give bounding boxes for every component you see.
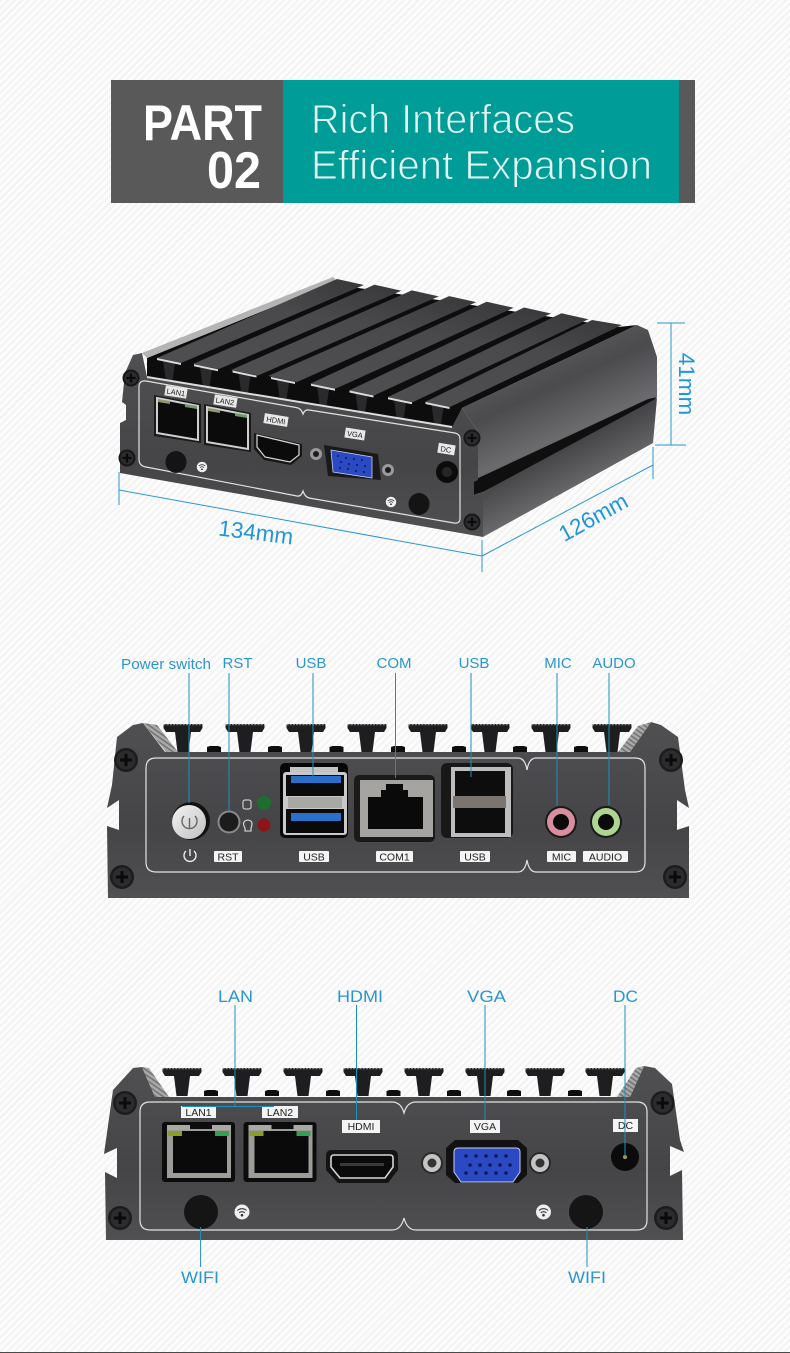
header banner xyxy=(111,80,695,203)
bottom rule xyxy=(0,1352,790,1353)
panel tags: VGA xyxy=(474,1121,496,1133)
callout labels: COM xyxy=(376,655,412,672)
heading: Rich Interfaces Efficient Expansion: Efficient Expansion xyxy=(311,142,652,188)
front panel outline xyxy=(139,381,460,523)
dimension: 134mm xyxy=(119,472,482,572)
dimension: 126mm: 126mm xyxy=(554,488,632,547)
power button xyxy=(172,802,210,840)
callout labels: HDMI xyxy=(337,988,383,1006)
heading: PART 02 xyxy=(143,95,262,200)
LED indicators xyxy=(243,796,271,832)
screws xyxy=(108,1091,678,1230)
heading: Rich Interfaces Efficient Expansion: Rich Interfaces xyxy=(311,96,575,142)
panel tags: USB xyxy=(464,852,486,864)
body xyxy=(104,1066,684,1240)
callout lines xyxy=(189,673,609,811)
port: VGA xyxy=(310,445,394,480)
AUDIO jack xyxy=(590,806,622,838)
panel outline xyxy=(146,758,645,872)
panel tags: COM1 xyxy=(379,852,410,864)
device: 3D perspective view with dimensions xyxy=(118,277,699,572)
port labels on panel xyxy=(164,385,456,455)
callout labels: USB xyxy=(459,655,489,672)
callout labels: MIC xyxy=(544,655,572,672)
screws xyxy=(118,370,480,530)
side face xyxy=(462,325,657,537)
port: LAN2 xyxy=(204,404,251,452)
panel tags: USB xyxy=(303,852,325,864)
panel tags xyxy=(184,849,628,864)
callout labels: WIFI xyxy=(181,1269,219,1287)
fins xyxy=(164,724,632,752)
port labels on panel: HDMI xyxy=(266,415,286,426)
body xyxy=(107,722,689,898)
heatsink fins top xyxy=(142,277,637,430)
port labels on panel: DC xyxy=(440,444,453,455)
port: DC xyxy=(436,461,458,483)
panel tags: LAN2 xyxy=(267,1107,293,1119)
dimension: 41mm: 41mm xyxy=(674,353,699,415)
panel outline xyxy=(140,1102,647,1230)
panel tags: AUDIO xyxy=(589,852,622,864)
dimension: 41mm xyxy=(655,323,699,445)
callout labels: USB xyxy=(296,655,326,672)
port labels on panel: LAN2 xyxy=(215,396,235,407)
port: HDMI xyxy=(326,1150,398,1183)
panel tags: DC xyxy=(618,1120,633,1132)
heading: PART 02: 02 xyxy=(207,142,261,200)
wifi caps and icons xyxy=(166,451,430,515)
port: VGA xyxy=(421,1140,551,1183)
callout labels: RST xyxy=(222,655,252,672)
callout labels: Power switch xyxy=(121,657,211,673)
screws xyxy=(110,748,687,889)
COM port xyxy=(354,775,435,842)
panel tags: RST xyxy=(218,852,239,864)
port: DC xyxy=(611,1143,639,1171)
dimension: 134mm: 134mm xyxy=(217,516,295,550)
callout labels xyxy=(121,655,636,673)
device: rear I/O view xyxy=(107,655,689,898)
heading: Rich Interfaces Efficient Expansion xyxy=(311,96,652,188)
port labels on panel: LAN1 xyxy=(166,387,186,398)
USB 3.0 stack xyxy=(280,763,348,838)
port: LAN1 xyxy=(162,1122,235,1182)
panel tags: MIC xyxy=(552,852,572,864)
callout labels xyxy=(181,988,638,1287)
MIC jack xyxy=(545,806,577,838)
port: LAN2 xyxy=(244,1122,316,1182)
port labels on panel: VGA xyxy=(346,429,363,440)
panel tags: HDMI xyxy=(348,1121,374,1133)
port: LAN1 xyxy=(154,395,201,443)
callout labels: WIFI xyxy=(568,1269,606,1287)
callout labels: DC xyxy=(613,988,638,1006)
reset button xyxy=(218,810,240,834)
callout lines xyxy=(182,1005,625,1267)
dimension: 126mm xyxy=(482,447,653,556)
heading: PART 02: PART xyxy=(143,95,262,151)
callout labels: LAN xyxy=(218,988,253,1006)
wifi caps and icons xyxy=(184,1195,603,1229)
panel tags: LAN1 xyxy=(185,1107,212,1119)
fins xyxy=(162,1068,624,1096)
USB 2.0 stack xyxy=(441,763,513,838)
front face xyxy=(120,353,483,537)
callout labels: VGA xyxy=(467,988,506,1006)
port: HDMI xyxy=(254,433,302,465)
device: front LAN/HDMI/VGA view xyxy=(104,988,684,1287)
panel tags xyxy=(181,1106,638,1133)
callout labels: AUDO xyxy=(592,655,636,672)
